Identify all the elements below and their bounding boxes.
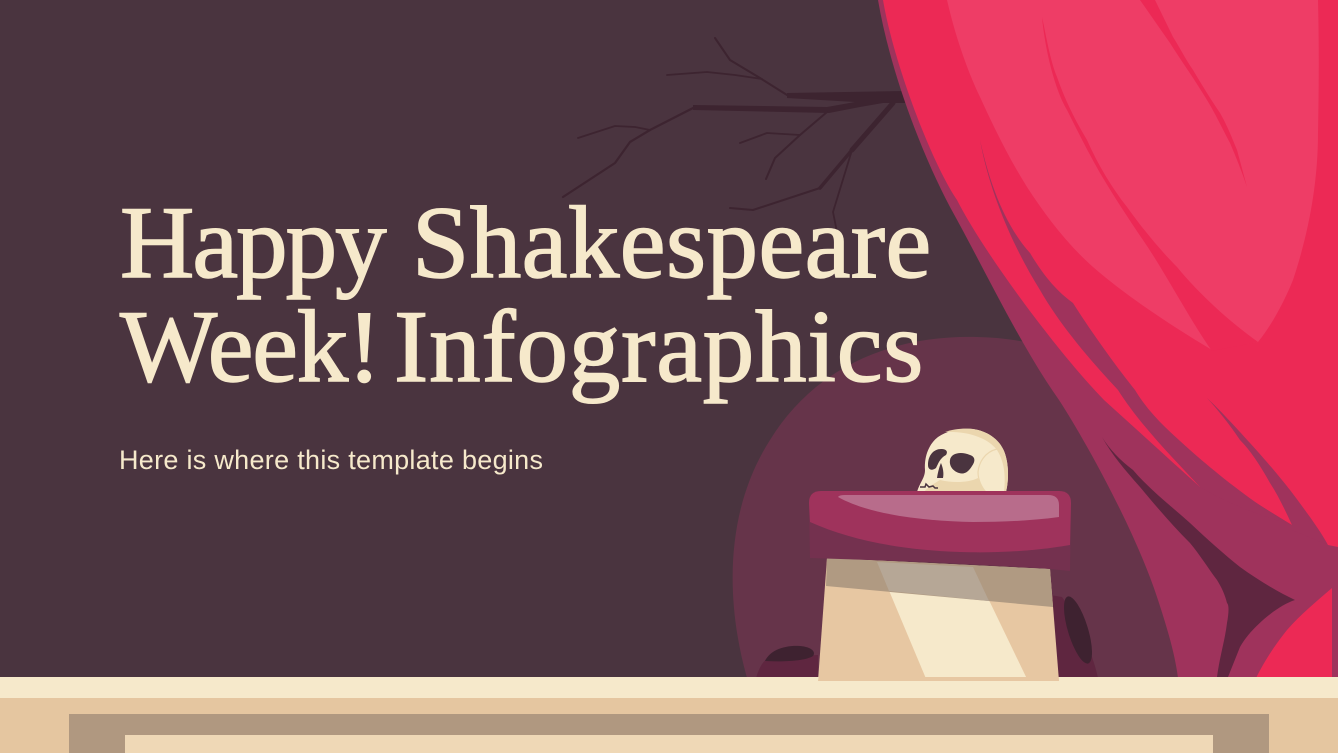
- table inner panel: [125, 735, 1213, 753]
- purple fold crease, upper: [980, 140, 1292, 525]
- purple fold crease, right: [1207, 398, 1328, 545]
- bare tree branch: [563, 38, 905, 232]
- right eye socket: [950, 453, 974, 474]
- light beam on box: [877, 562, 1028, 681]
- cushion highlight: [838, 495, 1059, 522]
- pedestal front foot over table: [818, 677, 1059, 681]
- cranium: [917, 429, 1008, 492]
- rocks behind pedestal: [756, 594, 1098, 678]
- pedestal: [809, 491, 1071, 681]
- title: Infographics: [394, 290, 924, 404]
- title: [120, 186, 932, 404]
- cranium top shading: [945, 429, 1008, 492]
- beam in shadow: [877, 562, 989, 601]
- lower right red fold: [1256, 588, 1332, 678]
- table top: [0, 677, 1338, 698]
- right rock: [1050, 595, 1098, 678]
- left rock: [756, 655, 818, 678]
- left rock shadow: [765, 646, 814, 661]
- cranium seam: [978, 449, 997, 492]
- title: Shakespeare: [412, 186, 932, 300]
- left eye socket: [928, 449, 947, 470]
- cushion lower: [809, 491, 1071, 571]
- box shadow: [826, 558, 1053, 607]
- stage table: [0, 677, 1338, 753]
- dark inner fold: [1102, 437, 1295, 677]
- title: Week!: [120, 290, 380, 404]
- cushion upper: [809, 491, 1071, 552]
- curtain main red fold: [883, 0, 1338, 547]
- pink highlight panel: [947, 0, 1319, 350]
- red crease in pink panel, long: [1042, 17, 1258, 351]
- teeth: [920, 484, 938, 488]
- table base: [0, 698, 1338, 753]
- skull: [917, 429, 1008, 492]
- spotlight circle: [733, 337, 1200, 678]
- stage curtain: [878, 0, 1338, 678]
- cheek shading: [924, 478, 986, 492]
- right rock shadow: [1058, 594, 1098, 666]
- subtitle: Here is where this template begins: [119, 445, 543, 475]
- red crease in pink panel, short: [1140, 0, 1247, 187]
- pedestal box: [818, 558, 1059, 681]
- title: Happy: [120, 186, 387, 300]
- curtain back layer: [878, 0, 1338, 678]
- table recess: [69, 714, 1269, 753]
- nose: [937, 463, 943, 478]
